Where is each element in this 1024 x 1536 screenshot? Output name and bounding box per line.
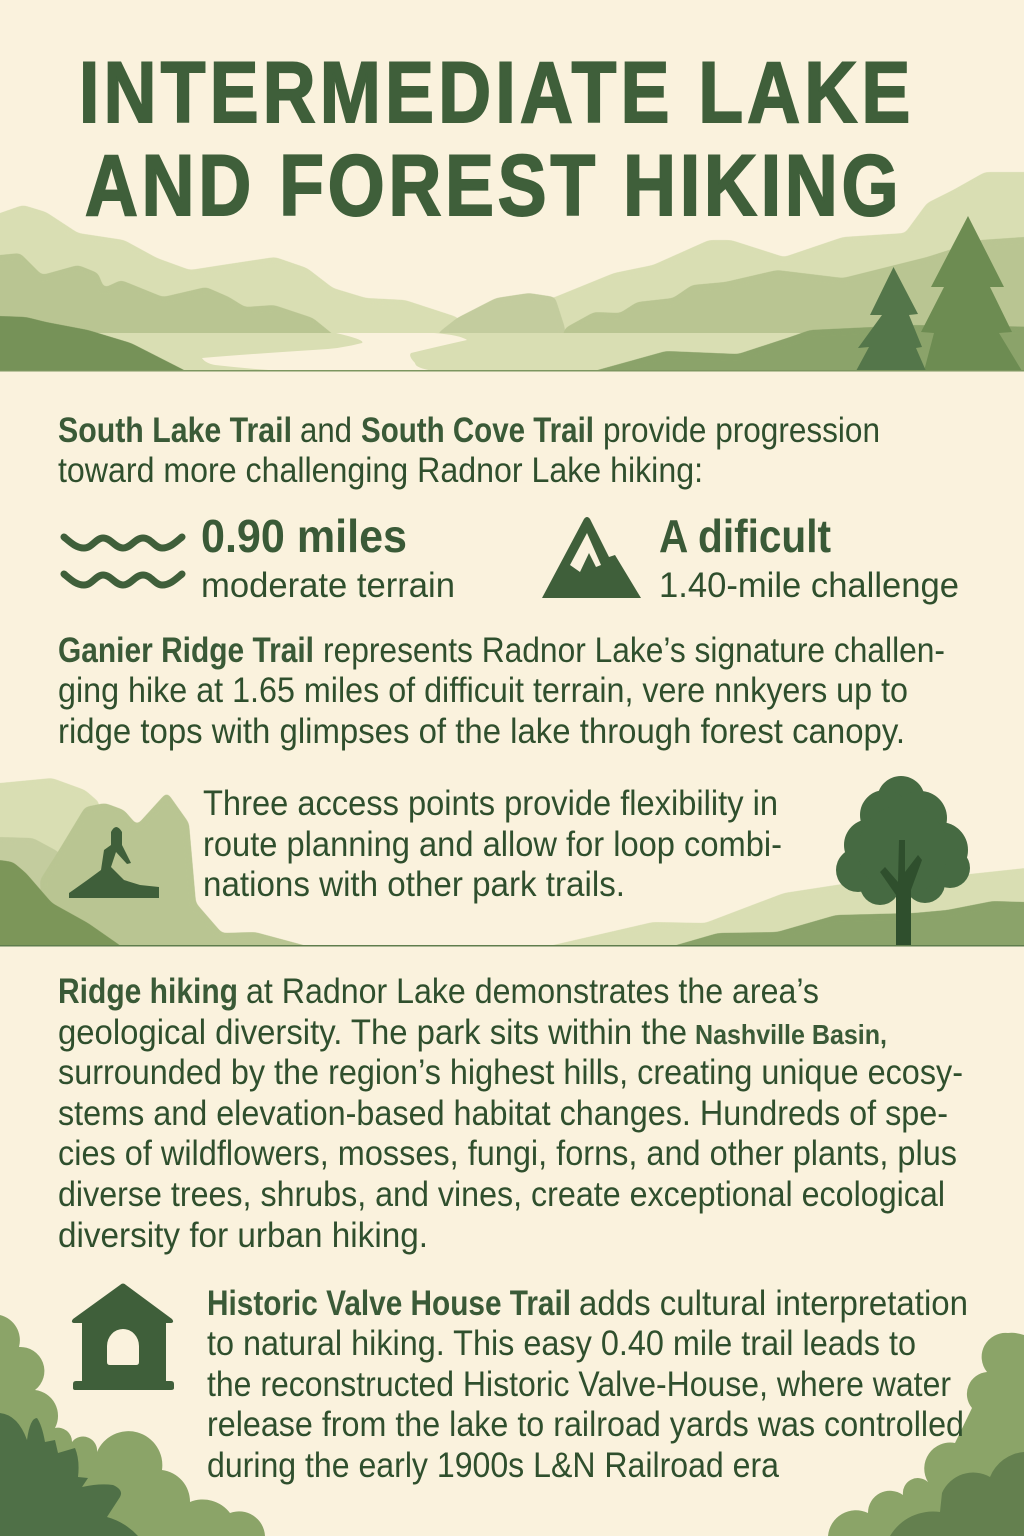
ridge hiking text: cies of wildflowers, mosses, fungi, forns, and other plants, plus [58, 1134, 957, 1173]
ridge hiking text: Ridge hiking [58, 972, 238, 1011]
Ganier Ridge text [58, 631, 945, 751]
ridge hiking text: diverse trees, shrubs, and vines, create exceptional ecological [58, 1175, 945, 1214]
stat: difficult: 1.40-mile challenge [659, 566, 959, 605]
ridge hiking text: surrounded by the region’s highest hills, creating unique ecosy- [58, 1053, 963, 1092]
bushes bottom right [828, 1333, 1024, 1536]
intro text: South Lake Trail [58, 411, 292, 450]
bushes bottom left [0, 1315, 265, 1536]
valve house text: adds cultural interpretation [579, 1284, 968, 1323]
stat: 0.90 miles: 0.90 miles [201, 510, 407, 562]
Ganier Ridge text: ridge tops with glimpses of the lake through forest canopy. [58, 712, 905, 751]
valve house text: Historic Valve House Trail [207, 1284, 571, 1323]
icon: tree [836, 776, 970, 946]
Ganier Ridge text: ging hike at 1.65 miles of difficuit terrain, vere nnkyers up to [58, 671, 908, 710]
stat: difficult [659, 510, 959, 605]
valve house text: during the early 1900s L&N Railroad era [207, 1446, 779, 1485]
icon: waves [64, 537, 182, 585]
access points text [203, 784, 782, 904]
intro text: toward more challenging Radnor Lake hiking: [58, 451, 703, 490]
stat: difficult: A dificult [659, 510, 831, 562]
small pine tree [856, 267, 926, 371]
ridge hiking text: Nashville Basin, [695, 1019, 887, 1050]
ridge hiking text: diversity for urban hiking. [58, 1216, 428, 1255]
middle band right hills [530, 865, 1024, 965]
stat: 0.90 miles [201, 510, 455, 605]
icon: valve house [72, 1284, 174, 1390]
intro text: and [300, 411, 352, 450]
valve house text: release from the lake to railroad yards was controlled [207, 1405, 964, 1444]
title: AND FOREST HIKING [85, 137, 898, 233]
ridge hiking text [58, 972, 963, 1255]
access points text: Three access points provide flexibility in [203, 784, 778, 823]
access points text: nations with other park trails. [203, 865, 625, 904]
Ganier Ridge text: represents Radnor Lake’s signature challen- [323, 631, 945, 670]
foreground hill left [0, 316, 210, 390]
ridge hiking text: stems and elevation-based habitat changes. Hundreds of spe- [58, 1094, 948, 1133]
icon: hiker figure [69, 827, 159, 898]
Ganier Ridge text: Ganier Ridge Trail [58, 631, 314, 670]
hero landscape: mountains, lake and pines [0, 172, 1024, 391]
intro text [58, 411, 880, 490]
icon: mountain [542, 517, 641, 598]
intro text: South Cove Trail [361, 411, 594, 450]
middle band left landscape [0, 778, 340, 965]
ridge hiking text: at Radnor Lake demonstrates the area’s [246, 972, 819, 1011]
stat: 0.90 miles: moderate terrain [201, 566, 455, 605]
title [79, 44, 910, 233]
section divider band [0, 945, 1024, 966]
valve house text: the reconstructed Historic Valve-House, where water [207, 1365, 951, 1404]
foreground hill right [570, 325, 1024, 390]
large pine tree [921, 216, 1022, 371]
title: INTERMEDIATE LAKE [79, 44, 910, 140]
ridge hiking text: geological diversity. The park sits within the [58, 1013, 687, 1052]
valve house text [207, 1284, 968, 1485]
valve house text: to natural hiking. This easy 0.40 mile trail leads to [207, 1324, 916, 1363]
river [202, 333, 467, 371]
intro text: provide progression [603, 411, 880, 450]
access points text: route planning and allow for loop combi- [203, 825, 782, 864]
